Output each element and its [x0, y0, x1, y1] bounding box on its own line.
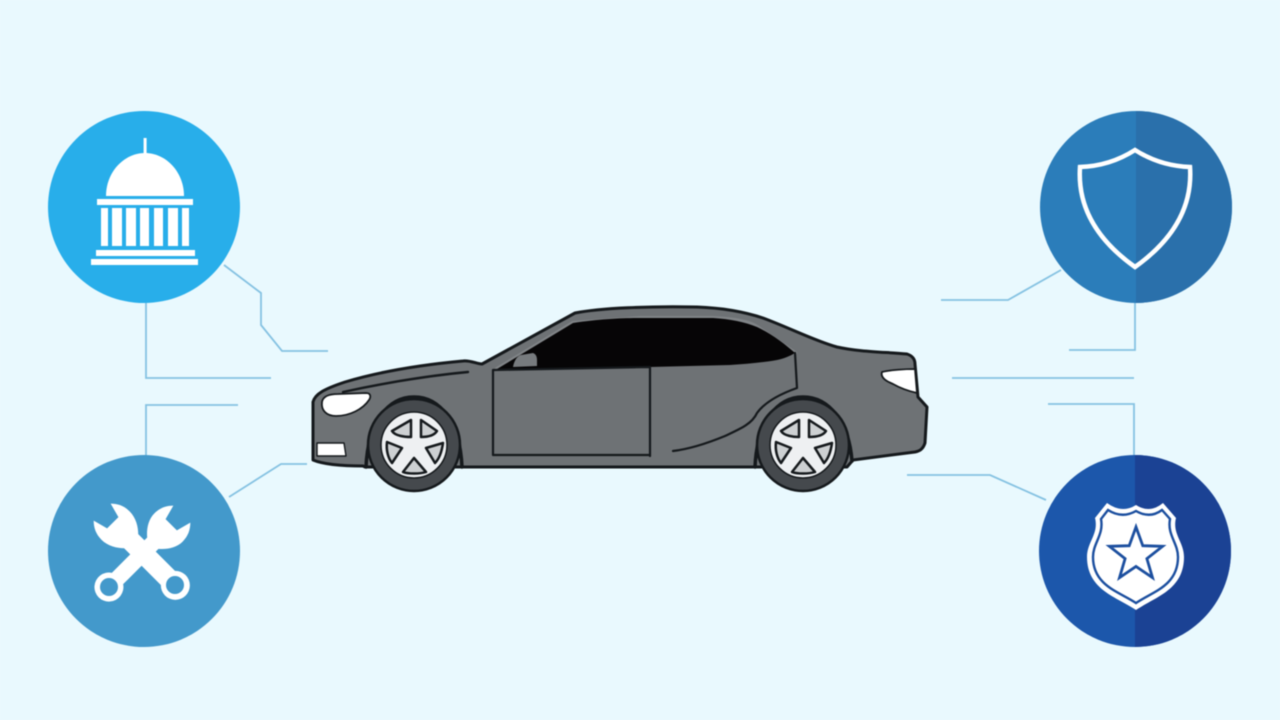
front wheel [366, 397, 462, 491]
rear wheel [755, 397, 852, 491]
tail light [882, 369, 917, 393]
connector lines: left side [146, 265, 328, 497]
hood crease [343, 372, 468, 392]
side mirror [513, 353, 537, 367]
car body [313, 307, 927, 467]
icon: government building circle [48, 111, 240, 303]
fog light [317, 443, 346, 456]
rear door line [673, 353, 797, 451]
icon: police badge circle [1039, 455, 1231, 647]
roof highlight [497, 318, 795, 369]
door lines [493, 367, 650, 456]
icon: insurance shield circle [1040, 111, 1232, 303]
headlight [322, 393, 370, 416]
icon: crossed wrenches circle [48, 455, 240, 647]
side windows [497, 318, 795, 369]
connector lines: right side [907, 270, 1135, 500]
car illustration [313, 307, 927, 491]
